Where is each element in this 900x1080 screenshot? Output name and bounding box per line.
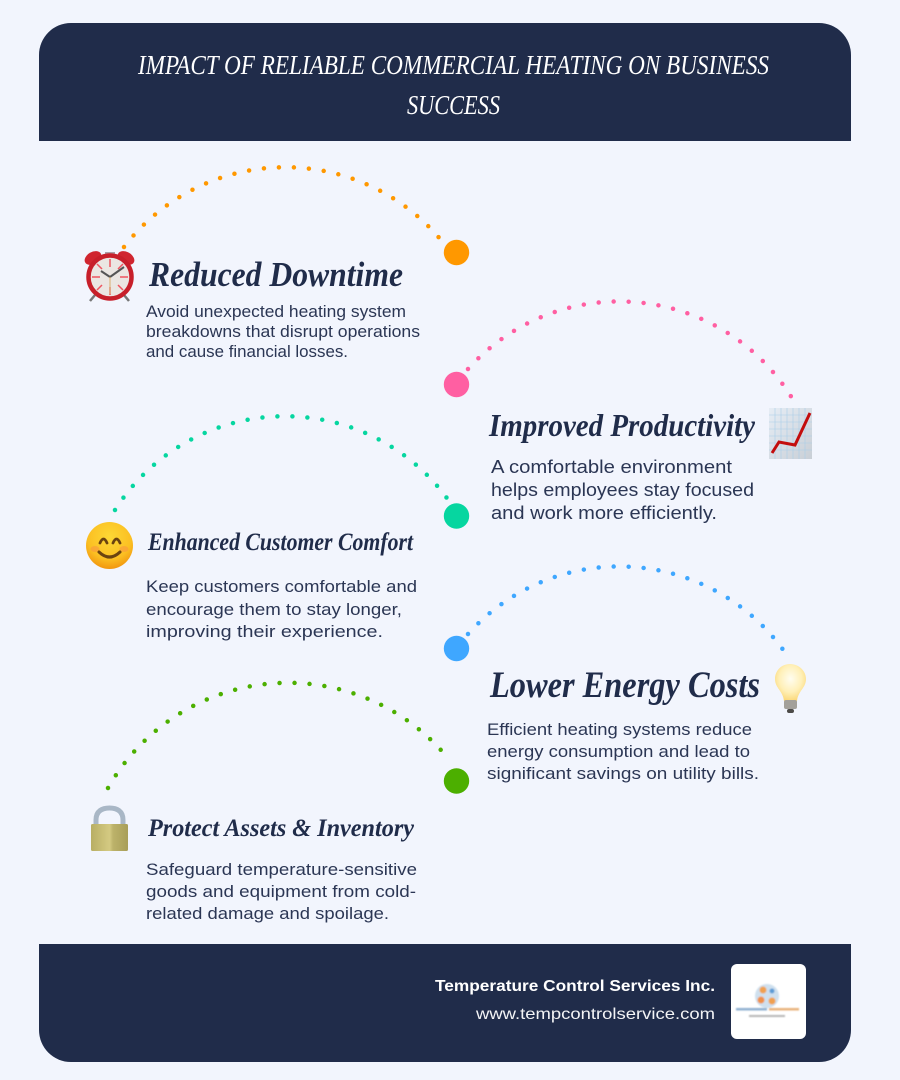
description: Efficient heating systems reduce [487,720,752,739]
dotted arc: teal [115,416,449,510]
heading: Protect Assets & Inventory [147,815,415,842]
heading: Lower Energy Costs [489,665,760,706]
header banner [39,23,851,141]
item: enhanced customer comfort [86,416,469,641]
company name: Temperature Control Services Inc. [435,978,715,995]
icon: padlock [91,808,128,851]
node: pink [444,372,469,397]
description: significant savings on utility bills. [487,764,759,783]
icon: light bulb [775,664,806,713]
footer banner [39,944,851,1062]
description: Safeguard temperature-sensitive [146,860,417,879]
description: and work more efficiently. [491,503,717,523]
description [487,720,759,783]
item: improved productivity [444,301,812,523]
description [146,577,417,641]
description: Avoid unexpected heating system [146,303,406,321]
title: IMPACT OF RELIABLE COMMERCIAL HEATING ON BUSINESS [137,50,769,80]
description: encourage them to stay longer, [146,600,402,619]
heading: Improved Productivity [488,407,756,443]
description: improving their experience. [146,622,383,641]
description: goods and equipment from cold- [146,882,416,901]
dotted arc: green [108,683,447,788]
icon: alarm clock [82,248,137,301]
node: orange [444,240,469,265]
icon: smiling face [86,522,133,569]
description: and cause financial losses. [146,343,348,361]
icon: chart increasing [769,408,812,459]
description [491,457,754,523]
node: blue [444,636,469,661]
item: protect assets and inventory [91,683,469,923]
heading: Reduced Downtime [148,255,403,294]
node: green [444,768,469,794]
item: lower energy costs [444,566,806,783]
heading: Enhanced Customer Comfort [147,529,414,556]
description: energy consumption and lead to [487,742,750,761]
description: breakdowns that disrupt operations [146,323,420,341]
dotted arc: pink [468,301,792,398]
description [146,860,417,923]
logo [731,964,806,1039]
description: related damage and spoilage. [146,904,389,923]
website: www.tempcontrolservice.com [475,1006,715,1023]
description [146,303,420,361]
description: helps employees stay focused [491,480,754,500]
dotted arc: orange [124,167,441,247]
dotted arc: blue [468,566,783,650]
node: teal [444,503,469,529]
title [137,50,769,120]
item: reduced downtime [82,167,469,361]
description: A comfortable environment [491,457,732,477]
title: SUCCESS [407,90,500,120]
description: Keep customers comfortable and [146,577,417,596]
